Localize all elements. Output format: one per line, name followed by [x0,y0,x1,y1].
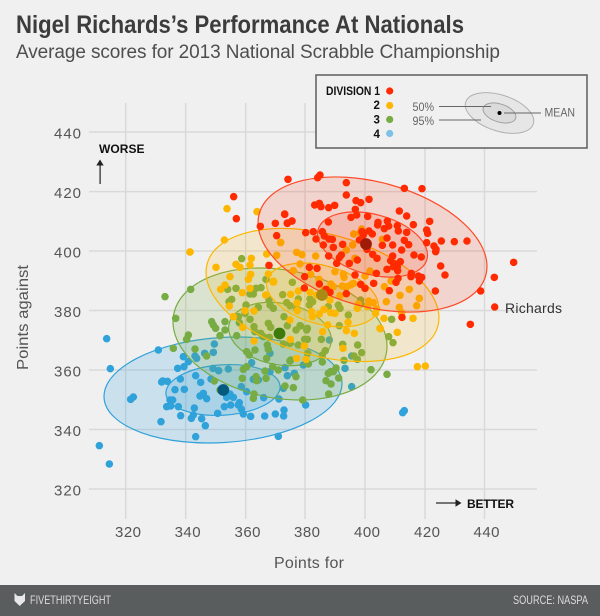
red points left edge [230,193,296,269]
legend division labels: 4 [374,129,380,141]
footer brand: FIVETHIRTYEIGHT [30,593,112,607]
legend division labels: DIVISION 1 [326,86,381,98]
x axis tick labels: 360 [234,524,260,541]
green points upper right [279,279,395,332]
blue outlier points [300,336,408,416]
blue 50 percent ellipse [164,361,282,419]
legend division labels [326,86,381,141]
y axis title: Points against [15,264,32,370]
yellow 95 percent ellipse [191,205,454,385]
red points [281,171,517,328]
red 95 percent ellipse [243,154,502,335]
green points left outliers [161,293,179,322]
y axis tick labels: 380 [54,304,81,321]
y axis tick labels [54,126,81,500]
division 4 ellipses and points [96,330,408,468]
legend ellipse labels: MEAN [544,108,575,120]
x axis tick labels: 420 [414,524,440,541]
legend division labels: 3 [374,114,380,126]
legend division dots [386,87,393,137]
x axis tick labels: 380 [294,524,320,541]
green 95 percent ellipse [162,252,398,416]
y axis tick labels: 420 [54,185,81,202]
division 2 ellipses and points [186,205,454,385]
legend ellipse labels [412,102,575,128]
y axis tick labels: 360 [54,364,81,380]
division means [217,238,372,396]
x axis title: Points for [274,555,345,572]
x axis tick labels: 440 [474,524,500,541]
yellow points center left [186,248,308,362]
green 50 percent ellipse [223,294,337,374]
blue points [96,335,298,468]
y axis tick labels: 340 [54,423,81,440]
better label: BETTER [467,497,514,511]
legend ellipse labels: 50% [412,102,434,114]
x axis tick labels: 400 [354,524,380,541]
arrow: better [436,499,462,507]
green points [183,255,311,364]
worse label: WORSE [99,142,144,156]
legend panel [316,75,587,148]
division 3 ellipses and points [161,252,398,416]
legend ellipse labels: 95% [412,116,434,128]
legend ellipse key [439,85,541,141]
icon: fox logo [14,593,25,606]
x axis tick labels: 340 [175,524,201,541]
yellow points upper left [186,205,284,256]
y axis tick labels: 320 [54,482,81,500]
blue 95 percent ellipse [101,330,345,450]
Richards label: Richards [505,300,562,316]
division 1 ellipses and points [230,154,517,335]
yellow 50 percent ellipse [259,252,386,338]
subtitle: Average scores for 2013 National Scrabble Championship [16,42,500,63]
title: Nigel Richards’s Performance At Nationals [16,11,464,39]
arrow: worse [96,160,104,184]
x axis tick labels [115,524,500,541]
x axis tick labels: 320 [115,524,141,541]
red 50 percent ellipse [310,201,435,288]
y axis tick labels: 400 [54,244,81,262]
y axis tick labels: 440 [54,126,81,142]
yellow points upper right [277,225,423,332]
legend division labels: 2 [374,100,380,112]
footer bar [0,585,600,616]
green points lower right [286,333,397,404]
green points lower left [170,345,300,402]
yellow points lower right [302,325,429,370]
Richards point [491,303,498,311]
